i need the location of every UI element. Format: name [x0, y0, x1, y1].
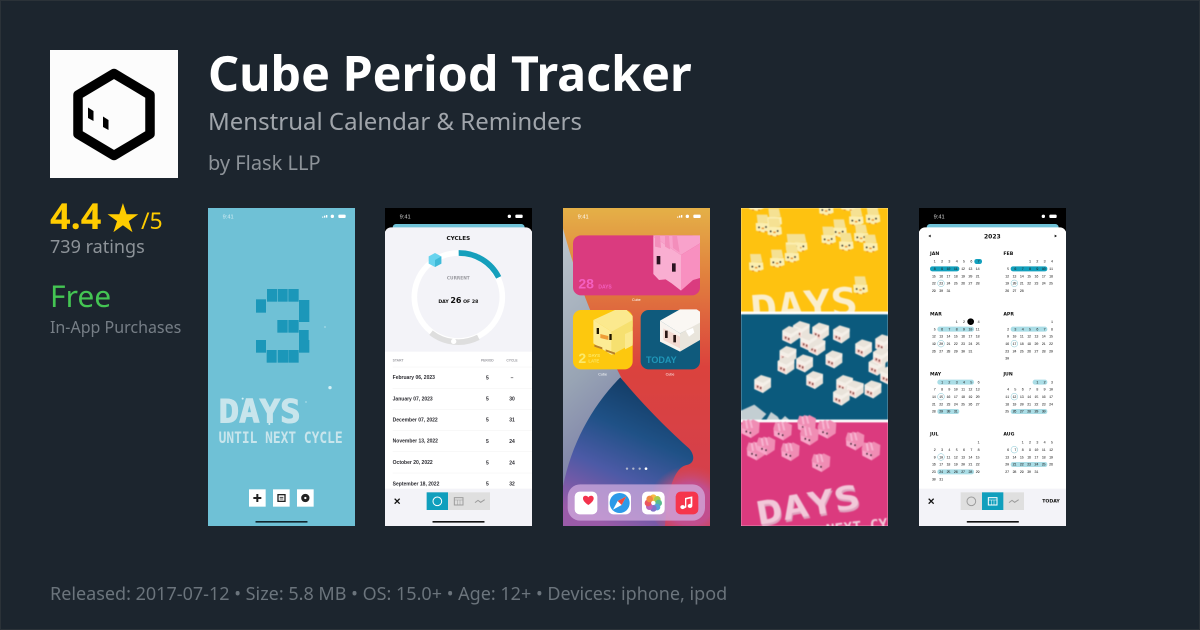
screenshot 5: calendar: 9:41 — [934, 214, 945, 220]
screenshot 2: cycles: 5 — [486, 439, 489, 445]
screenshot 5: calendar: MAY — [930, 372, 942, 378]
screenshot 5: calendar: FEB — [1003, 251, 1014, 257]
developer: by Flask LLP — [208, 149, 321, 176]
screenshot 5: calendar: TODAY — [1042, 499, 1060, 505]
screenshot 3: home screen widgets: Cube — [666, 372, 674, 376]
screenshot 2: cycles: CURRENT — [447, 276, 470, 282]
screenshot 5: calendar: 25 26 27 28 29 30 — [1003, 411, 1046, 415]
screenshot 2: cycles: CYCLES — [446, 236, 470, 242]
subtitle: Menstrual Calendar & Reminders — [208, 105, 582, 138]
screenshot 5: calendar: 7 8 9 10 11 12 13 — [930, 389, 980, 393]
screenshot 2: cycles: 5 — [486, 375, 489, 381]
screenshot 5: calendar: 12 13 14 15 16 17 18 — [1003, 275, 1053, 279]
screenshot 5: calendar: 23 24 25 26 27 28 29 — [930, 471, 980, 475]
rating: ★ — [105, 189, 141, 244]
screenshot 2: cycles: START — [393, 358, 404, 362]
screenshot 4: character panels — [741, 208, 888, 526]
screenshot 2: cycles: 30 — [509, 397, 515, 403]
screenshot 5: calendar: 21 22 23 24 25 26 27 — [930, 403, 980, 407]
screenshot 3: home screen widgets: DAYS — [598, 284, 612, 290]
screenshot 2: cycles: January 07, 2023 — [393, 396, 433, 402]
title: Cube Period Tracker — [208, 40, 692, 106]
screenshot 2: cycles: 31 — [509, 418, 515, 424]
screenshot 5: calendar: 30 31 — [930, 478, 944, 482]
screenshot 5: calendar: 20 21 22 23 24 25 26 — [1003, 464, 1053, 468]
screenshot 5: calendar: 13 14 15 16 17 18 19 — [1003, 456, 1053, 460]
screenshot 1: days until next cycle: 9:41 — [223, 214, 234, 220]
screenshot 2: cycles: 5 — [486, 460, 489, 466]
screenshot 5: calendar: 29 30 31 — [930, 290, 951, 294]
screenshot 2: cycles: CYCLE — [506, 358, 518, 362]
screenshot 5: calendar: 30 — [1003, 358, 1009, 362]
screenshot 2: cycles: November 13, 2022 — [393, 439, 438, 445]
screenshot 5: calendar: 1 2 3 — [1003, 381, 1053, 385]
screenshot 5: calendar: 18 19 20 21 22 23 24 — [1003, 403, 1054, 407]
screenshot 2: cycles: PERIOD — [481, 358, 494, 362]
screenshot 3: home screen widgets: 28 — [578, 275, 594, 291]
app icon — [50, 50, 178, 178]
rating: 4.4 — [50, 191, 101, 240]
screenshot 5: calendar: 8 9 10 11 12 13 14 — [930, 268, 981, 272]
screenshot 5: calendar: 16 17 18 19 20 21 22 — [1003, 343, 1053, 347]
screenshot 5: calendar: 4 5 6 7 8 9 10 — [1003, 389, 1053, 393]
screenshot 2: cycles: – — [511, 375, 514, 381]
screenshot 2: cycles: 24 — [509, 439, 515, 445]
screenshot 5: calendar: JUL — [929, 432, 939, 438]
screenshot 5: calendar: JUN — [1002, 372, 1013, 378]
screenshot 5: calendar: 15 16 17 18 19 20 21 — [930, 275, 981, 279]
screenshot 5: calendar: 12 13 14 15 16 17 18 — [930, 336, 980, 340]
screenshot 2: cycles: 5 — [486, 418, 489, 424]
screenshot 5: calendar: 9 10 11 12 13 14 15 — [1003, 336, 1053, 340]
screenshot 5: calendar: 1 — [930, 442, 981, 446]
screenshot 2: cycles: 5 — [486, 482, 489, 488]
screenshot 5: calendar: 1 2 3 4 — [1003, 261, 1054, 265]
screenshot 3: home screen widgets: LATE — [588, 359, 599, 364]
screenshot 5: calendar: 22 23 24 25 26 27 28 — [930, 283, 980, 287]
screenshot 5: calendar: 23 24 25 26 27 28 29 — [1003, 350, 1053, 354]
screenshot 5: calendar: 1 2 3 4 5 6 — [930, 381, 980, 385]
screenshot 3: home screen widgets: 9:41 — [578, 214, 589, 220]
screenshot 5: calendar: 1 2 3 4 — [930, 321, 981, 325]
screenshot 4: character panels: DAYS — [749, 279, 859, 334]
screenshot 5: calendar: 5 6 7 8 9 10 11 — [930, 328, 981, 332]
screenshot 3: home screen widgets — [563, 208, 710, 526]
screenshot 5: calendar: 1 2 3 4 5 — [1003, 442, 1053, 446]
screenshot 5: calendar: 1 — [1003, 321, 1054, 325]
screenshot 5: calendar — [919, 208, 1066, 526]
screenshot 1: days until next cycle — [208, 208, 355, 526]
screenshot 5: calendar: 26 27 28 29 30 31 — [930, 350, 973, 354]
screenshot 2: cycles: DAY 26 OF 28 — [438, 296, 478, 305]
screenshot 5: calendar: 6 7 8 9 10 11 12 — [1003, 449, 1053, 453]
screenshot 5: calendar: APR — [1003, 311, 1014, 317]
screenshot 2: cycles: 9:41 — [400, 214, 411, 220]
screenshot 3: home screen widgets: DAYS — [588, 353, 600, 358]
screenshot 5: calendar: 19 20 21 22 23 24 25 — [1003, 283, 1053, 287]
ratings count: 739 ratings — [50, 235, 145, 259]
screenshot 3: home screen widgets: TODAY — [646, 355, 677, 365]
screenshot 5: calendar: 14 15 16 17 18 19 20 — [930, 396, 980, 400]
price: Free — [50, 275, 111, 316]
screenshot 5: calendar: 27 28 29 30 31 — [1003, 471, 1039, 475]
screenshot 5: calendar: 16 17 18 19 20 21 22 — [930, 464, 980, 468]
screenshot 5: calendar: 2023 — [984, 233, 1001, 240]
screenshot 2: cycles: December 07, 2022 — [393, 417, 438, 423]
screenshot 5: calendar: 11 12 13 14 15 16 17 — [1003, 396, 1053, 400]
screenshot 2: cycles: 32 — [509, 482, 515, 488]
screenshot 5: calendar: 28 29 30 31 — [930, 411, 959, 415]
screenshot 5: calendar: AUG — [1003, 432, 1015, 438]
screenshot 2: cycles: September 18, 2022 — [393, 481, 440, 487]
screenshot 5: calendar: 5 6 7 8 9 10 11 — [1003, 268, 1054, 272]
screenshot 5: calendar: 2 3 4 5 6 7 8 — [1003, 328, 1053, 332]
rating: /5 — [141, 204, 163, 236]
screenshot 5: calendar: JAN — [929, 251, 939, 257]
screenshot 2: cycles: 5 — [486, 397, 489, 403]
screenshot 1: days until next cycle: DAYS — [219, 392, 301, 430]
rating — [50, 189, 163, 244]
screenshot 5: calendar: 1 2 3 4 5 6 7 — [930, 261, 980, 265]
footer metadata: Released: 2017-07-12 • Size: 5.8 MB • OS: 15.0+ • Age: 12+ • Devices: iphone, ipod — [50, 582, 727, 606]
screenshot 5: calendar: MAR — [930, 311, 942, 317]
screenshot 3: home screen widgets: Cube — [598, 372, 607, 376]
screenshot 2: cycles: October 20, 2022 — [393, 460, 433, 466]
in-app purchases note: In-App Purchases — [50, 316, 181, 338]
screenshot 2: cycles — [385, 208, 532, 526]
screenshot 5: calendar: 19 20 21 22 23 24 25 — [930, 343, 980, 347]
screenshot 5: calendar: 26 27 28 — [1003, 290, 1024, 294]
screenshot 2: cycles: 24 — [509, 460, 515, 466]
screenshot 3: home screen widgets: Cube — [632, 298, 641, 302]
screenshot 5: calendar: 9 10 11 12 13 14 15 — [930, 456, 980, 460]
screenshot 3: home screen widgets: 2 — [578, 350, 586, 366]
screenshot 2: cycles: February 06, 2023 — [393, 375, 435, 381]
screenshot 5: calendar: 2 3 4 5 6 7 8 — [930, 449, 980, 453]
